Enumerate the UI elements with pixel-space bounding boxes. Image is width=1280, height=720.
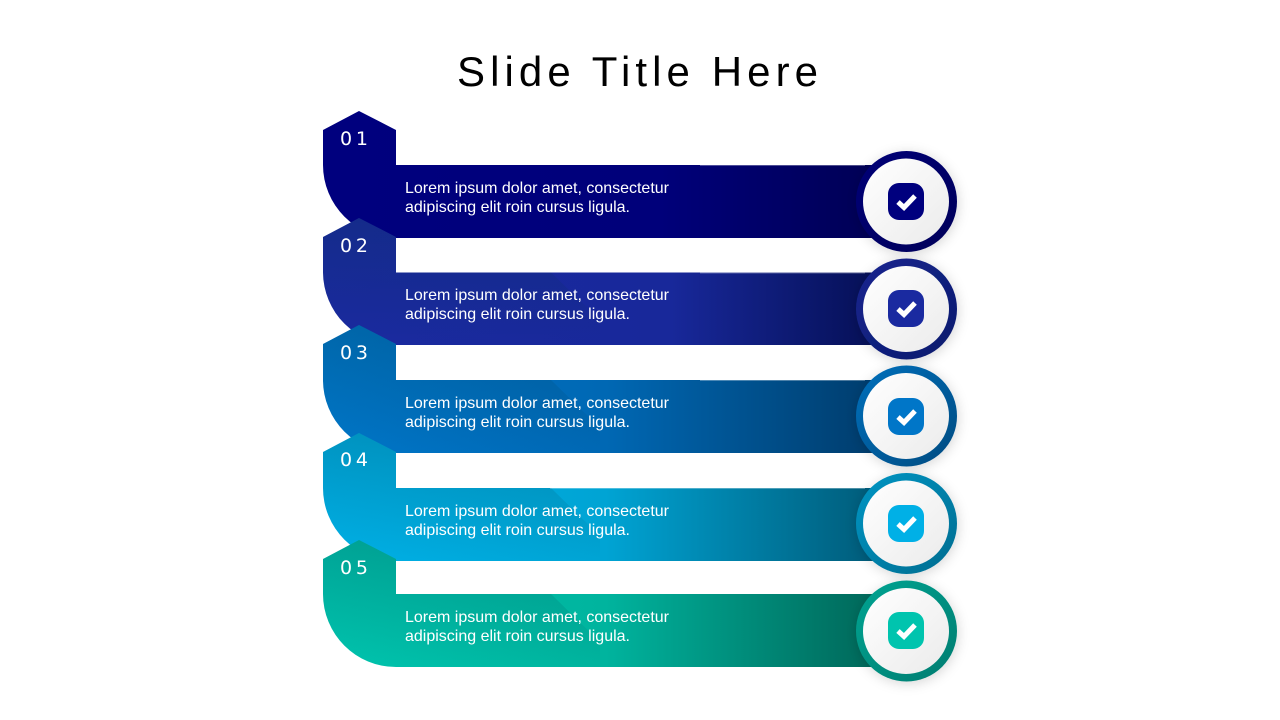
title: Slide Title Here bbox=[457, 48, 818, 95]
panel: item 03 bbox=[323, 325, 957, 466]
text 03: adipiscing elit roin cursus ligula. bbox=[405, 414, 630, 431]
icon badge 05 bbox=[856, 580, 957, 682]
ribbon 01 bbox=[323, 111, 880, 238]
ribbon 02 bbox=[323, 218, 880, 345]
text 05 bbox=[405, 609, 670, 645]
panel: item 02 bbox=[323, 218, 957, 360]
fold shading 05 bbox=[323, 540, 600, 667]
fold shading 03 bbox=[323, 325, 600, 453]
fold shading 02 bbox=[323, 218, 600, 345]
text 05: Lorem ipsum dolor amet, consectetur bbox=[405, 609, 670, 626]
text 01: Lorem ipsum dolor amet, consectetur bbox=[405, 180, 670, 197]
ribbon 05 bbox=[323, 540, 880, 667]
panel: item 04 bbox=[323, 433, 957, 574]
icon badge 01 bbox=[856, 151, 957, 252]
number 04: 04 bbox=[340, 449, 368, 471]
text 04: Lorem ipsum dolor amet, consectetur bbox=[405, 503, 670, 520]
number 05: 05 bbox=[340, 557, 368, 579]
text 03 bbox=[405, 395, 670, 431]
icon badge 04 bbox=[856, 473, 957, 574]
text 02: Lorem ipsum dolor amet, consectetur bbox=[405, 287, 670, 304]
number 02: 02 bbox=[340, 235, 368, 257]
number 03: 03 bbox=[340, 342, 368, 364]
text 02: adipiscing elit roin cursus ligula. bbox=[405, 306, 630, 323]
text 04: adipiscing elit roin cursus ligula. bbox=[405, 522, 630, 539]
text 02 bbox=[405, 287, 670, 323]
panel: item 05 bbox=[323, 540, 957, 682]
text 03: Lorem ipsum dolor amet, consectetur bbox=[405, 395, 670, 412]
icon badge 03 bbox=[856, 366, 957, 466]
panel: item 01 bbox=[323, 111, 957, 252]
text 05: adipiscing elit roin cursus ligula. bbox=[405, 628, 630, 645]
text 01 bbox=[405, 180, 670, 216]
text 01: adipiscing elit roin cursus ligula. bbox=[405, 199, 630, 216]
number 01: 01 bbox=[340, 128, 368, 150]
ribbon 04 bbox=[323, 433, 880, 561]
ribbon 03 bbox=[323, 325, 880, 453]
text 04 bbox=[405, 503, 670, 539]
icon badge 02 bbox=[856, 258, 957, 360]
fold shading 04 bbox=[323, 433, 600, 561]
